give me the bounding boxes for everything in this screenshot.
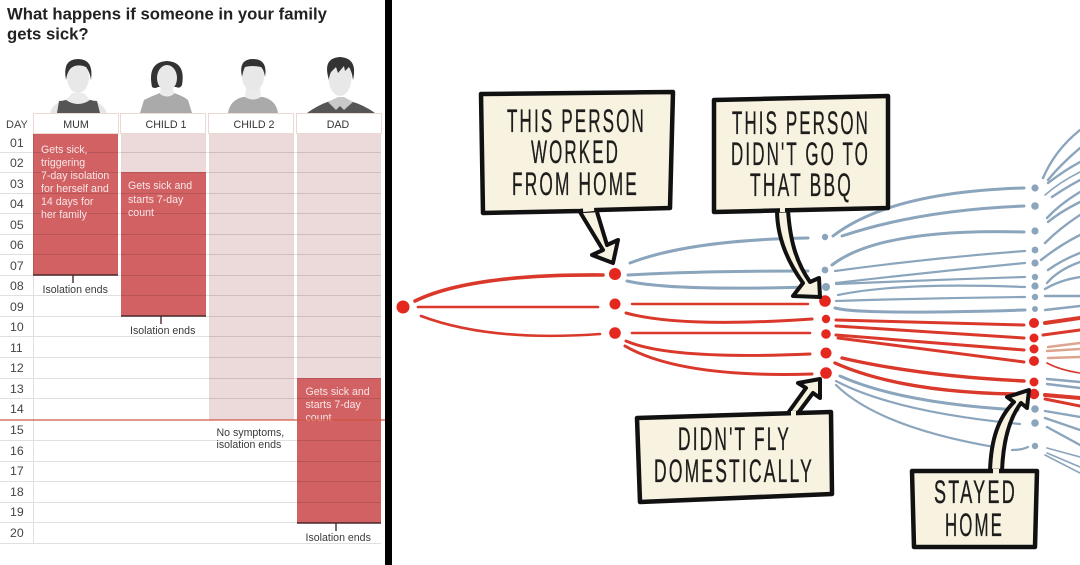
mum annotation: her family: [41, 209, 88, 221]
divider bar: [385, 0, 392, 565]
dad annotation: starts 7-day: [306, 399, 362, 411]
callout: worked from home: THIS PERSON: [507, 103, 646, 139]
callout: didn't fly domestically: DIDN'T FLY: [678, 421, 791, 457]
callout: worked from home: WORKED: [531, 134, 620, 170]
day labels: DAY: [6, 119, 28, 131]
portrait: dad: [307, 57, 375, 113]
isolation end markers: [33, 275, 381, 544]
day labels: 18: [10, 485, 24, 499]
day labels: 05: [10, 218, 24, 232]
callout: stayed home: STAYED: [934, 474, 1017, 510]
isolation end markers: Isolation ends: [130, 325, 195, 337]
isolation end markers: Isolation ends: [42, 284, 108, 296]
title: gets sick?: [7, 24, 89, 44]
day labels: 09: [10, 300, 24, 314]
mum annotation: 7-day isolation: [41, 170, 109, 182]
isolation end markers: isolation ends: [216, 439, 281, 451]
callout: didn't go to that BBQ: THAT BBQ: [750, 167, 853, 203]
callout: didn't fly domestically: [637, 379, 832, 502]
day labels: 11: [10, 341, 23, 355]
blue nodes: [822, 184, 1039, 449]
panel: family isolation chart: [0, 4, 385, 544]
portrait: mum: [50, 59, 107, 113]
day labels: 19: [10, 505, 24, 519]
column headers: DAD: [327, 119, 350, 131]
blue branches: [627, 130, 1080, 473]
day labels: 15: [10, 423, 24, 437]
day labels: 16: [10, 444, 24, 458]
callout: worked from home: [481, 92, 673, 263]
child 1 annotation: Gets sick and: [128, 180, 192, 192]
day labels: 06: [10, 238, 24, 252]
callout: didn't go to that BBQ: [714, 96, 888, 297]
day labels: 20: [10, 526, 24, 540]
day labels: 10: [10, 320, 24, 334]
day labels: 14: [10, 402, 24, 416]
portrait: child 1: [140, 61, 192, 113]
day labels: 04: [10, 197, 24, 211]
mum annotation: 14 days for: [41, 196, 94, 208]
isolation bars: [33, 134, 381, 523]
portrait: child 2: [228, 59, 278, 113]
callout: didn't go to that BBQ: THIS PERSON: [732, 105, 870, 141]
child 1 annotation: starts 7-day: [128, 194, 184, 206]
callout: worked from home: FROM HOME: [512, 166, 639, 202]
dad annotation: Gets sick and: [306, 386, 370, 398]
red branches: [415, 275, 1080, 406]
isolation end markers: No symptoms,: [216, 427, 284, 439]
day labels: 01: [10, 136, 24, 150]
red nodes: [396, 268, 1039, 399]
child 1 annotation: count: [128, 207, 154, 219]
day labels: 13: [10, 382, 24, 396]
callout: didn't go to that BBQ: DIDN'T GO TO: [731, 136, 870, 172]
day labels: 02: [10, 156, 24, 170]
column headers: [34, 114, 382, 134]
day labels: 07: [10, 259, 24, 273]
mum annotation: for herself and: [41, 183, 109, 195]
isolation end markers: Isolation ends: [306, 532, 371, 544]
panel: transmission tree: [396, 92, 1080, 547]
mum annotation: triggering: [41, 157, 85, 169]
title: What happens if someone in your family: [7, 4, 328, 24]
day labels: 08: [10, 279, 24, 293]
dad annotation: count: [306, 412, 331, 424]
column headers: CHILD 1: [146, 119, 187, 131]
mum annotation: Gets sick,: [41, 144, 88, 156]
callout: didn't fly domestically: DOMESTICALLY: [654, 453, 814, 489]
day 14 marker line: [0, 419, 385, 421]
column headers: CHILD 2: [234, 119, 275, 131]
day labels: [6, 119, 28, 540]
callout: stayed home: HOME: [945, 507, 1004, 543]
day labels: 17: [10, 464, 24, 478]
day labels: 12: [10, 361, 24, 375]
column headers: MUM: [63, 119, 89, 131]
callout: stayed home: [912, 390, 1037, 547]
day labels: 03: [10, 177, 24, 191]
